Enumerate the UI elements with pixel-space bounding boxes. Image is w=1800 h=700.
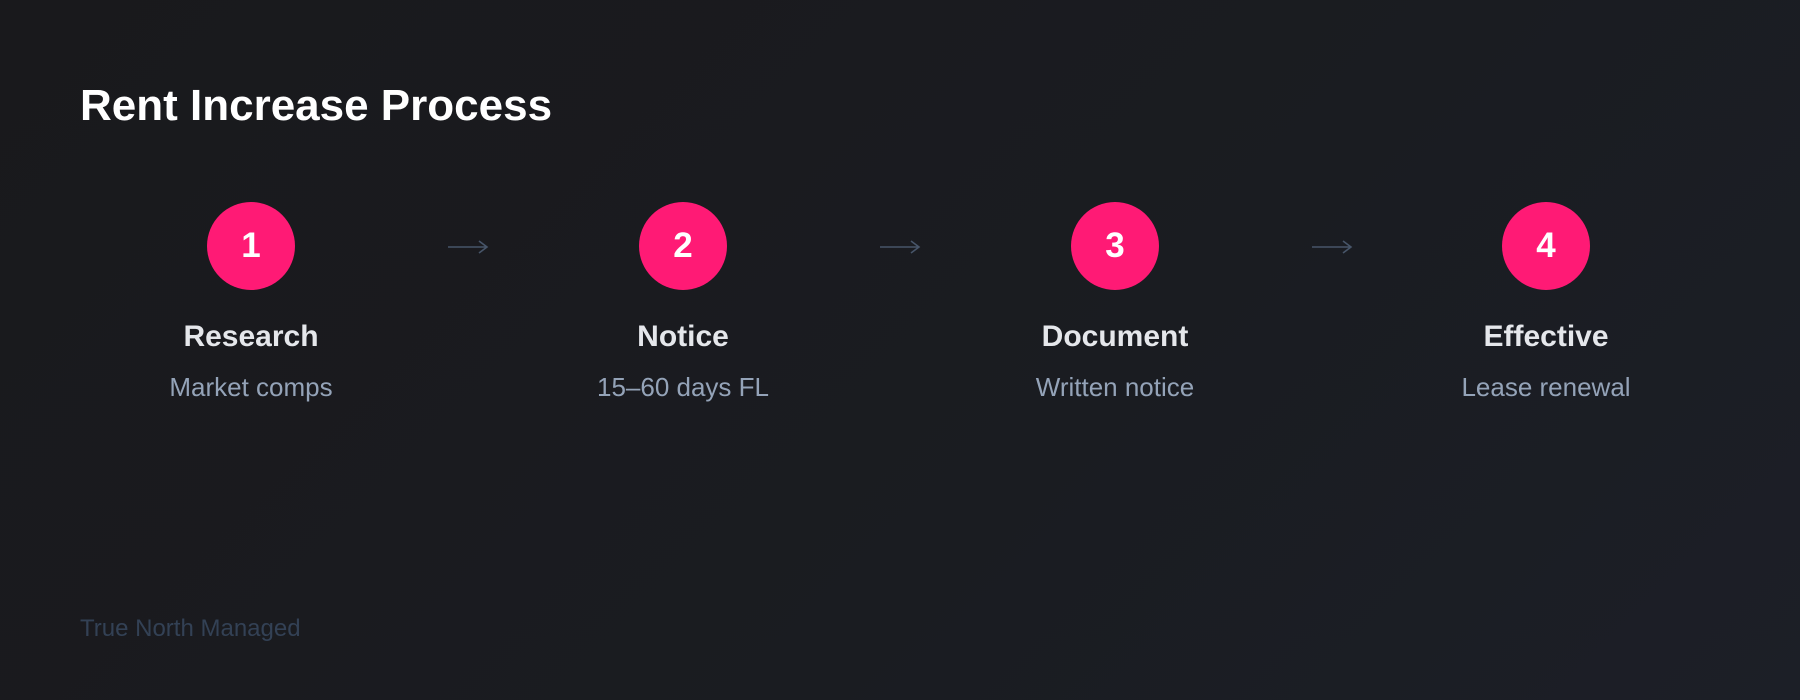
arrow 2 xyxy=(880,240,920,254)
step 3 description: Written notice xyxy=(1036,372,1194,402)
step 3 label: Document xyxy=(1042,320,1188,353)
step 3: document xyxy=(1036,202,1194,402)
step 1: research xyxy=(169,202,333,402)
footer: True North Managed xyxy=(80,615,301,642)
icon: number 2 circle: 2 xyxy=(673,226,693,265)
icon: number 4 circle xyxy=(1502,202,1590,290)
title: Rent Increase Process xyxy=(80,81,552,130)
icon: number 2 circle xyxy=(639,202,727,290)
step 4: effective xyxy=(1461,202,1631,402)
arrow 1 xyxy=(448,240,488,254)
step 2 description: 15–60 days FL xyxy=(597,372,769,402)
icon: number 4 circle: 4 xyxy=(1536,226,1556,265)
step 2: notice xyxy=(597,202,769,402)
icon: number 3 circle xyxy=(1071,202,1159,290)
arrow 3 xyxy=(1312,240,1352,254)
icon: number 1 circle: 1 xyxy=(241,226,261,265)
step 2 label: Notice xyxy=(637,320,729,353)
step 1 label: Research xyxy=(183,320,319,353)
step 1 description: Market comps xyxy=(169,372,333,402)
step 4 description: Lease renewal xyxy=(1461,372,1631,402)
step 4 label: Effective xyxy=(1483,320,1609,353)
icon: number 3 circle: 3 xyxy=(1105,226,1125,265)
icon: number 1 circle xyxy=(207,202,295,290)
